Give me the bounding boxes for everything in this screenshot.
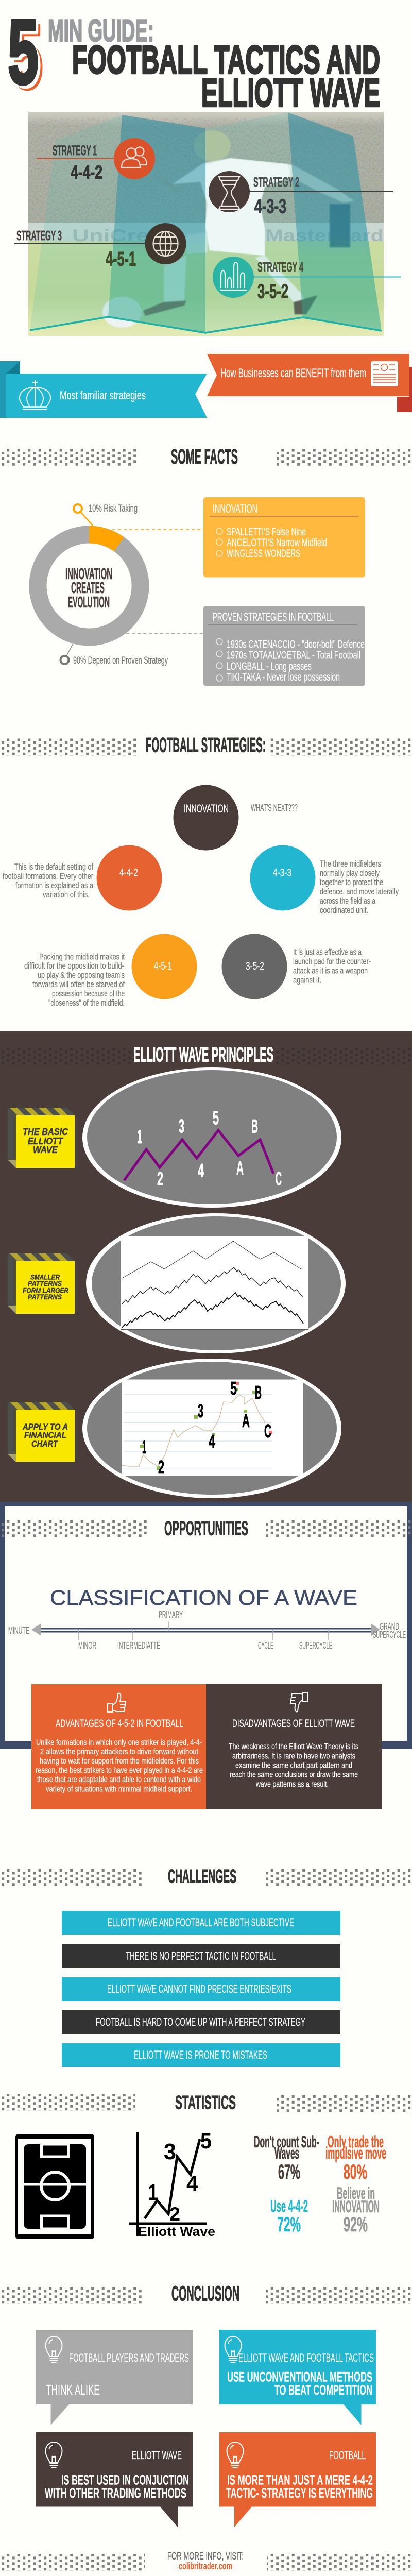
section heading: statistics [2, 2092, 412, 2113]
bar 5 [62, 2043, 340, 2067]
panel: advantages: having to wait for support from the midfielders. For this [40, 1757, 199, 1766]
label: 10% risk taking: 10% Risk Taking [89, 503, 138, 514]
callout: football [219, 2432, 376, 2527]
circle: innovation: WHAT'S NEXT??? [251, 802, 298, 813]
chart: elliott wave icon [129, 2128, 215, 2239]
icon: people [122, 147, 147, 167]
circle: 4-3-3: together to protect the [320, 877, 383, 887]
heading: OPPORTUNITIES [164, 1518, 248, 1539]
chart: basic wave: 2 [157, 1168, 163, 1189]
label: the basic elliott wave: THE BASIC [23, 1127, 68, 1137]
circle: 4-4-2: football formations. Every other [3, 871, 93, 881]
panel: disadvantages: examine the same chart part pattern and [235, 1761, 352, 1770]
panel: proven strategies: LONGBALL - Long passes [227, 660, 312, 672]
chart: basic wave: 3 [179, 1116, 184, 1137]
big number 5 [8, 1, 43, 108]
section heading: statistics: STATISTICS [175, 2092, 236, 2113]
stat: use 4-4-2: Use 4-4-2 [270, 2197, 308, 2215]
heading: ELLIOTT WAVE PRINCIPLES [133, 1044, 273, 1066]
panel: advantages: 2 allows the primary attackers to drive forward without [40, 1748, 198, 1756]
panel: challenges list [62, 1911, 340, 2067]
chart: elliott wave icon: 5 [200, 2128, 212, 2154]
stat: only trade the impulsive move [325, 2132, 386, 2183]
strategy 1 [37, 138, 155, 182]
icon: thumbs down [290, 1693, 308, 1711]
chart: financial chart with wave count: 1 [142, 1436, 146, 1458]
chart: financial chart with wave count: C [264, 1420, 271, 1442]
chart: financial chart with wave count: 5 [230, 1378, 237, 1399]
panel: advantages: those that are adaptable and able to contend with a wide [37, 1775, 201, 1784]
circle: 4-3-3: 4-3-3 [273, 867, 291, 879]
arrow: wave degree scale: SUPERCYCLE [299, 1640, 332, 1651]
label: apply to a financial chart: CHART [31, 1439, 58, 1449]
section heading: football strategies [0, 734, 412, 756]
chart: elliott wave icon: 1 [148, 2180, 158, 2205]
panel: football photo with folded map: UniCredit [72, 226, 178, 245]
circle: 4-3-3: coordinated unit. [320, 905, 368, 915]
arrow: wave degree scale: PRIMARY [159, 1609, 183, 1620]
panel: football photo with folded map [14, 112, 401, 336]
strategy 3: 4-5-1 [106, 248, 136, 270]
circle: 4-3-3 [250, 845, 399, 915]
circle: 3-5-2: against it. [293, 975, 321, 985]
label: apply to a financial chart [8, 1402, 75, 1462]
title [8, 1, 380, 115]
stat: believe in innovation: Believe in [337, 2184, 375, 2202]
big number 5: 5 [12, 6, 43, 108]
banner: how businesses can benefit [207, 354, 412, 412]
arrow: wave degree scale: MINOR [78, 1640, 96, 1651]
section heading: challenges [0, 1866, 412, 1887]
stat: use 4-4-2: 72% [277, 2213, 301, 2236]
label: 10% risk taking [74, 503, 138, 526]
chart: elliott wave icon: 3 [164, 2139, 176, 2164]
callout: football players and traders: THINK ALIKE [46, 2382, 100, 2398]
icon: hourglass [219, 177, 239, 209]
panel: disadvantages [206, 1684, 382, 1809]
banner: most familiar strategies: Most familiar strategies [60, 388, 146, 402]
panel: innovation: ANCELOTTI'S Narrow Midfield [227, 537, 327, 549]
chart: financial chart with wave count [82, 1359, 341, 1498]
circle: 4-5-1: forwards will often be starved of [32, 979, 125, 989]
stat: believe in innovation [332, 2184, 380, 2236]
stat: don't count sub-waves: 67% [278, 2161, 300, 2183]
circle: 3-5-2 [221, 934, 371, 999]
panel: innovation: SPALLETTI'S False Nine [227, 526, 306, 538]
panel: disadvantages: arbitrariness. It is rare to have two analysts [232, 1752, 355, 1761]
stat: believe in innovation: 92% [344, 2213, 368, 2236]
panel: innovation [203, 497, 365, 577]
chart: innovation donut [29, 503, 168, 666]
section heading: some facts [2, 445, 412, 468]
bar 4 [62, 2010, 340, 2034]
banner: most familiar strategies [0, 361, 207, 418]
circle: 4-3-3: normally play closely [320, 868, 380, 878]
bar 2: THERE IS NO PERFECT TACTIC IN FOOTBALL [126, 1950, 276, 1962]
circle: 4-4-2: formation is explained as a [15, 880, 93, 890]
strategy 2: STRATEGY 2 [253, 174, 299, 190]
circle: 4-3-3: The three midfielders [320, 859, 381, 869]
circle: 4-4-2: 4-4-2 [119, 867, 138, 879]
chart: financial chart with wave count: B [255, 1382, 262, 1403]
strategy 4: 3-5-2 [258, 280, 288, 303]
section heading: conclusion [2, 2281, 412, 2305]
icon: thumbs up [108, 1693, 126, 1712]
strategy 4: STRATEGY 4 [258, 259, 303, 275]
chart: nested wave patterns [86, 1213, 346, 1353]
panel: advantages: reason, the best strikers to have ever played in a 4-4-2 are [36, 1766, 203, 1775]
panel: elliott wave principles [0, 1031, 412, 1502]
chart: financial chart with wave count: 2 [158, 1456, 164, 1478]
heading [0, 1518, 412, 1539]
chart: basic wave: A [236, 1157, 244, 1179]
label: 90% proven strategy [61, 643, 168, 666]
strategy 3: STRATEGY 3 [16, 228, 62, 243]
chart: elliott wave icon: Elliott Wave [138, 2225, 215, 2239]
panel: opportunities: CLASSIFICATION OF A WAVE [50, 1586, 357, 1609]
panel: innovation: INNOVATION [213, 502, 258, 515]
icon: banknote [371, 361, 398, 386]
circle: innovation: INNOVATION [184, 802, 229, 815]
circle: 4-5-1: Packing the midfield makes it [39, 952, 125, 961]
footer: more info: FOR MORE INFO, VISIT: [167, 2551, 244, 2562]
icon: football pitch [15, 2134, 94, 2239]
statistics numbers [254, 2132, 386, 2236]
circle: 4-4-2 [3, 845, 162, 911]
section heading: conclusion: CONCLUSION [171, 2281, 239, 2305]
chart: basic wave [82, 1067, 341, 1208]
panel: football photo with folded map: MasterCard [265, 226, 384, 245]
arrow: wave degree scale: INTERMEDIATTE [117, 1640, 160, 1651]
donut centre label [65, 565, 112, 611]
stat: only trade the impulsive move: 80% [344, 2161, 367, 2183]
label: the basic elliott wave: WAVE [33, 1145, 58, 1155]
panel: proven strategies [203, 606, 365, 686]
callout: elliott wave: WITH OTHER TRADING METHODS [45, 2485, 186, 2501]
map folds [30, 112, 382, 333]
panel: advantages: variety of situations with minimal midfield support. [46, 1785, 192, 1794]
panel: innovation: WINGLESS WONDERS [227, 548, 300, 560]
strategy 2 [209, 171, 393, 217]
bar 5: ELLIOTT WAVE IS PRONE TO MISTAKES [134, 2048, 267, 2061]
arrow: wave degree scale: MINUTE [8, 1625, 29, 1636]
label: the basic elliott wave: ELLIOTT [28, 1136, 64, 1146]
label: apply to a financial chart: FINANCIAL [24, 1430, 66, 1440]
panel: proven strategies: TIKI-TAKA - Never lose possession [227, 671, 340, 683]
chart: financial chart with wave count: 3 [198, 1400, 203, 1421]
label: 90% proven strategy: 90% Depend on Proven Strategy [73, 655, 168, 666]
panel: disadvantages: reach the same conclusions or draw the same [230, 1770, 358, 1780]
chart: financial chart with wave count: A [242, 1410, 250, 1431]
footer: more info: colibritrader.com [179, 2561, 232, 2572]
circle: 3-5-2: attack as it is as a weapon [293, 965, 368, 976]
icon: crown [20, 380, 50, 410]
strategy 4 [213, 257, 401, 303]
panel: advantages: Unlike formations in which only one striker is played, 4-4- [36, 1738, 202, 1747]
section heading: football strategies: FOOTBALL STRATEGIES: [146, 734, 266, 756]
panel: opportunities [0, 1502, 412, 1749]
chart: basic wave: B [251, 1116, 258, 1137]
arrow: wave degree scale: CYCLE [258, 1640, 273, 1651]
label: the basic elliott wave [8, 1108, 75, 1168]
panel: advantages [31, 1684, 206, 1809]
arrow: wave degree scale [8, 1609, 406, 1651]
callout: elliott wave and football tactics [219, 2330, 376, 2425]
circle: 4-5-1: difficult for the opposition to build- [24, 961, 124, 971]
label: smaller patterns: PATTERNS [28, 1293, 62, 1301]
label: smaller patterns: PATTERNS [28, 1279, 62, 1287]
bar 2 [62, 1944, 340, 1968]
stat: don't count sub-waves: Waves [274, 2144, 299, 2162]
chart: innovation donut: EVOLUTION [68, 593, 110, 611]
callout: football players and traders: FOOTBALL PLAYERS AND TRADERS [69, 2351, 189, 2364]
circle: 4-4-2: variation of this. [43, 890, 90, 900]
label: smaller patterns: FORM LARGER [23, 1286, 69, 1294]
callout: elliott wave: IS BEST USED IN CONJUCTION [61, 2472, 189, 2487]
callout: elliott wave [36, 2432, 193, 2527]
panel: football strategies circles [3, 785, 399, 1008]
circle: 4-3-3: across the field as a [320, 896, 375, 906]
circle: 3-5-2: 3-5-2 [246, 960, 264, 972]
bar 1: ELLIOTT WAVE AND FOOTBALL ARE BOTH SUBJECTIVE [108, 1916, 294, 1929]
chart: basic wave: 5 [213, 1108, 219, 1128]
strategy 3 [14, 223, 186, 270]
circle: innovation [173, 785, 298, 850]
label: apply to a financial chart: APPLY TO A [22, 1422, 68, 1432]
circle: 4-5-1: 4-5-1 [154, 960, 172, 972]
bar 3 [62, 1977, 340, 2001]
circle: 4-5-1: possession because of the [52, 989, 125, 998]
icon: bar arches [220, 262, 247, 290]
heading [0, 1044, 412, 1066]
label: smaller patterns [8, 1253, 75, 1314]
chart: basic wave: C [276, 1168, 282, 1189]
circle: 4-5-1: up play & the opposing team's [38, 970, 125, 980]
label: smaller patterns: SMALLER [30, 1273, 60, 1281]
circle: 3-5-2: launch pad for the counter- [293, 956, 371, 967]
donut centre label: CREATES [71, 579, 105, 597]
circle: 3-5-2: It is just as effective as a [293, 947, 362, 957]
callout: football players and traders [36, 2330, 193, 2425]
strategy 1: 4-4-2 [71, 162, 102, 182]
chart: elliott wave icon: 4 [186, 2171, 198, 2196]
chart: financial chart with wave count: 4 [209, 1431, 215, 1452]
circle: 4-5-1: "closeness" of the midfield. [48, 998, 125, 1008]
big number 5: 5 [10, 4, 41, 106]
bar 3: ELLIOTT WAVE CANNOT FIND PRECISE ENTRIES/EXITS [107, 1982, 291, 1995]
big number 5: 5 [8, 1, 39, 103]
footer: more info [0, 2551, 412, 2572]
callout: elliott wave: ELLIOTT WAVE [132, 2449, 182, 2462]
chart: elliott wave icon: 2 [169, 2204, 180, 2225]
title: MIN GUIDE: [48, 13, 154, 48]
chart: basic wave: 1 [137, 1126, 142, 1147]
section heading: some facts: SOME FACTS [171, 445, 238, 468]
strategy 1: STRATEGY 1 [53, 143, 97, 158]
bar 1 [62, 1911, 340, 1935]
circle: 4-4-2: This is the default setting of [14, 862, 93, 872]
panel: disadvantages: The weakness of the Elliott Wave Theory is its [229, 1742, 358, 1751]
callout: football: FOOTBALL [329, 2449, 366, 2462]
stat: don't count sub-waves [254, 2132, 319, 2183]
circle: 4-5-1 [24, 934, 197, 1008]
panel: advantages: ADVANTAGES OF 4-5-2 IN FOOTBALL [56, 1718, 183, 1730]
chart: basic wave: 4 [198, 1160, 204, 1181]
panel: disadvantages: wave patterns as a result. [255, 1780, 329, 1789]
icon: globe [153, 231, 178, 256]
chart: innovation donut: INNOVATION [65, 565, 112, 583]
stat: use 4-4-2 [270, 2197, 308, 2236]
strategy 2: 4-3-3 [254, 196, 286, 217]
section heading: challenges: CHALLENGES [168, 1866, 236, 1887]
statistics numbers: Don't count Sub- [254, 2132, 319, 2151]
